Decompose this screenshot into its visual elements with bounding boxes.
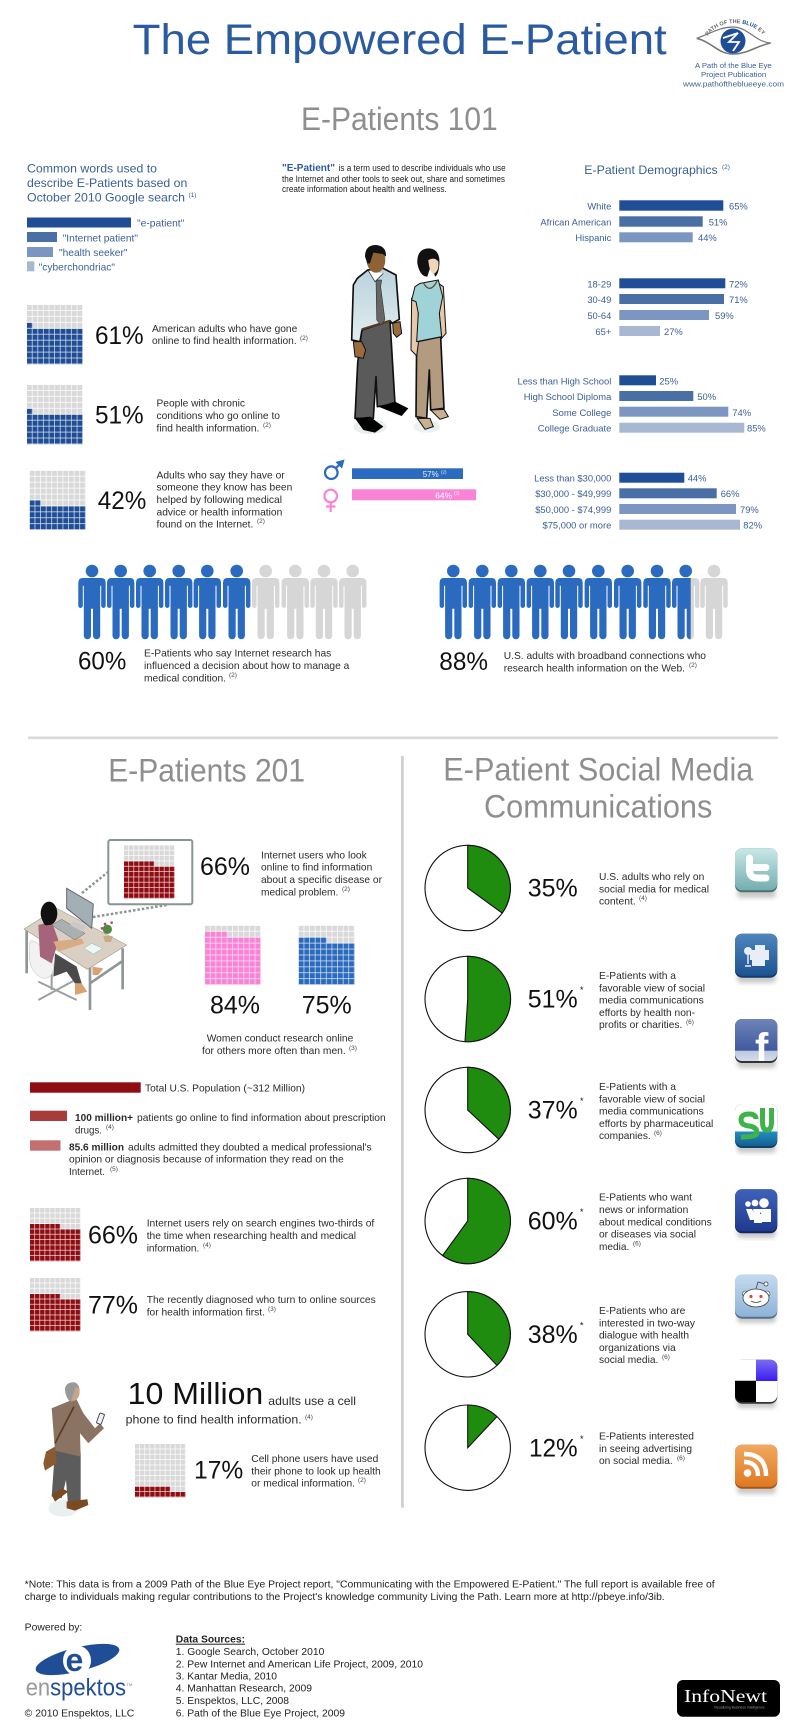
logo: InfoNewt: Visualizing Business Intelligence [714, 1706, 765, 1710]
income bars: 82% [743, 520, 762, 530]
stat 66% search engines: the time when researching health and medical [147, 1230, 356, 1242]
age bars: 18-29 [587, 278, 611, 290]
icon: Reddit [735, 1275, 777, 1323]
age bars: 59% [715, 310, 734, 321]
stat 35%: U.S. adults who rely on [599, 871, 704, 883]
stat 12%: in seeing advertising [599, 1443, 692, 1455]
note: charge to individuals making regular contributions to the Project's knowledge community Living the Path. Learn more at http://pbeye.info/3ib. [25, 1592, 665, 1603]
illustration: man and woman [352, 245, 448, 434]
logo: Enspektos [26, 1637, 132, 1702]
people pictogram 88% [440, 565, 728, 639]
stat 51%: * [580, 985, 584, 995]
stat 12%: E-Patients interested [599, 1431, 694, 1443]
income bars: $50,000 - $74,999 [535, 504, 611, 515]
stat 42% [98, 469, 292, 531]
85.6 million: 85.6 million [69, 1141, 124, 1153]
female bar: 64% [435, 491, 452, 500]
stat 88%: U.S. adults with broadband connections who [504, 650, 706, 662]
stat 37%: E-Patients with a [599, 1081, 676, 1093]
stat 17%: or medical information. [251, 1477, 355, 1489]
stat 51% [528, 970, 705, 1031]
stat 12%: * [580, 1434, 584, 1444]
panel: demographics [517, 163, 766, 530]
icon: male symbol [325, 461, 343, 479]
stat: women vs men [202, 991, 357, 1057]
stat 35%: social media for medical [599, 883, 709, 895]
pie 12% [425, 1405, 510, 1490]
icon: Delicious [735, 1360, 777, 1408]
pie 38% [425, 1292, 510, 1377]
waffle: women 84% [205, 926, 261, 985]
stat 37% [528, 1081, 713, 1142]
stat 66% look online: about a specific disease or [261, 874, 382, 886]
stat 51%: (2) [263, 422, 271, 429]
total population [30, 1082, 305, 1095]
stat 38%: 38% [528, 1321, 578, 1349]
stat 51%: E-Patients with a [599, 970, 676, 982]
stat 61%: (2) [300, 335, 308, 342]
stat 66% look online: (2) [342, 886, 350, 893]
stat 88%: (2) [689, 662, 697, 669]
stat 88% [439, 648, 706, 676]
stat 51%: profits or charities. [599, 1019, 682, 1031]
stat 42%: advice or health information [156, 506, 282, 518]
people pictogram 60% [78, 565, 366, 639]
logo: InfoNewt [677, 1680, 780, 1717]
demographics heading: E-Patient Demographics [584, 163, 718, 177]
age bars: 72% [729, 278, 748, 290]
100 million: (4) [106, 1124, 114, 1131]
data sources: 2. Pew Internet and American Life Project, 2009, 2010 [176, 1659, 423, 1670]
stat 51%: (6) [686, 1019, 694, 1026]
heading: E-Patients 101: E-Patients 101 [301, 101, 498, 137]
race bars: 44% [698, 232, 717, 243]
heading: E-Patient Social Media Communications: E-Patient Social Media [443, 752, 753, 788]
stat 37%: efforts by pharmaceutical [599, 1118, 713, 1130]
100 million: drugs. [75, 1124, 102, 1136]
data sources: 4. Manhattan Research, 2009 [176, 1684, 312, 1695]
stat 37%: favorable view of social [599, 1093, 705, 1105]
stat 17%: (2) [358, 1477, 366, 1484]
85.6 million: adults admitted they doubted a medical professional's [128, 1141, 372, 1153]
stat 60%: news or information [599, 1204, 688, 1216]
data sources [176, 1635, 423, 1719]
stat: women vs men: 84% [210, 991, 260, 1019]
E-Patient definition: create information about health and wellness. [282, 184, 447, 194]
female bar: (2) [454, 490, 460, 496]
stat 51%: conditions who go online to [156, 410, 280, 422]
data sources: 1. Google Search, October 2010 [176, 1647, 325, 1658]
education bars: 74% [732, 407, 751, 418]
education bars: High School Diploma [524, 391, 612, 402]
85.6 million: (5) [110, 1166, 118, 1173]
stat 88%: research health information on the Web. [504, 662, 685, 674]
note: *Note: This data is from a 2009 Path of the Blue Eye Project report, "Communicating with the Empowered E-Patient." The full report is available free of [25, 1580, 715, 1591]
stat 77% recently diagnosed [88, 1291, 376, 1319]
stat 37%: * [580, 1096, 584, 1106]
icon: robots [735, 934, 777, 983]
male bar: (2) [441, 470, 447, 474]
stat: 10 million: phone to find health information. [126, 1412, 302, 1426]
logo: Path of the Blue Eye: www.pathoftheblueeye.com [682, 80, 784, 89]
stat 60%: E-Patients who want [599, 1192, 692, 1204]
stat 77% recently diagnosed: The recently diagnosed who turn to online sources [147, 1294, 376, 1306]
icon: Twitter [735, 848, 777, 898]
E-Patient definition: "E-Patient" [282, 162, 335, 174]
waffle: 77% recently diagnosed [30, 1278, 81, 1331]
logo: Enspektos: e [66, 1642, 83, 1678]
stat 60%: 60% [528, 1208, 578, 1236]
male bar [352, 468, 463, 479]
income bars: 66% [721, 488, 739, 499]
stat 66% search engines: 66% [88, 1221, 138, 1249]
stat: 10 million: (4) [305, 1414, 313, 1421]
stat 42%: Adults who say they have or [156, 469, 285, 481]
stat: women vs men: 75% [302, 991, 352, 1019]
stat 38%: social media. [599, 1354, 658, 1366]
stat: women vs men: for others more often than men. [202, 1045, 346, 1057]
stat 51% [95, 398, 280, 434]
word bars: "e-patient" [137, 218, 185, 230]
word bars: "health seeker" [59, 247, 128, 259]
stat 17%: their phone to look up health [251, 1465, 381, 1477]
E-Patient definition: the Internet and other tools to seek out, share and sometimes [282, 174, 505, 184]
illustration: woman at desk [24, 888, 127, 1010]
stat 66% search engines: information. [147, 1242, 199, 1254]
stat 60%: media. [599, 1241, 629, 1253]
stat 60%: influenced a decision about how to manage a [144, 660, 349, 672]
education bars: 85% [747, 422, 766, 434]
logo: Path of the Blue Eye: A Path of the Blue Eye [695, 61, 772, 70]
waffle: 17% [135, 1444, 186, 1497]
stat 37%: companies. [599, 1130, 651, 1142]
waffle 51% [27, 385, 83, 444]
age bars: 50-64 [587, 310, 611, 321]
education bars: Some College [552, 407, 611, 418]
panel: waffle stats, 101 [27, 305, 308, 531]
stat 60%: E-Patients who say Internet research has [144, 648, 331, 660]
logo: InfoNewt: InfoNewt [684, 1686, 767, 1706]
income bars: 44% [688, 472, 706, 484]
common words heading [27, 162, 196, 204]
stat 17%: 17% [194, 1456, 243, 1484]
female bar [352, 489, 476, 500]
word bars [27, 218, 185, 274]
data sources: 6. Path of the Blue Eye Project, 2009 [176, 1708, 345, 1719]
stat 38%: E-Patients who are [599, 1305, 685, 1317]
waffle: 66% search engines [30, 1208, 81, 1261]
note [25, 1580, 715, 1603]
callout: monitor zoom waffle [82, 840, 192, 917]
age bars: 30-49 [587, 294, 611, 305]
race bars: African American [540, 216, 611, 228]
icon: MySpace [735, 1189, 777, 1238]
illustration: man with phone [43, 1382, 105, 1517]
logo: Path of the Blue Eye: Project Publication [701, 70, 766, 79]
heading: E-Patients 201: E-Patients 201 [108, 753, 305, 789]
stat 12%: 12% [529, 1434, 578, 1462]
common words heading: Common words used to [27, 162, 157, 176]
logo: Enspektos: enspektos [26, 1675, 126, 1702]
stat 37%: media communications [599, 1106, 704, 1118]
85.6 million: opinion or diagnosis because of information they read on the [69, 1154, 344, 1166]
stat 66% look online: Internet users who look [261, 849, 367, 861]
title: The Empowered E-Patient [133, 16, 667, 64]
stat 42%: someone they know has been [156, 482, 292, 494]
stat 61%: 61% [95, 322, 144, 350]
pie 35% [425, 845, 510, 931]
stat: 10 million: 10 Million [128, 1376, 263, 1411]
powered by: Powered by: [25, 1623, 82, 1634]
stat 17%: Cell phone users have used [251, 1453, 378, 1465]
stat 12% [529, 1431, 694, 1467]
race bars: White [587, 200, 611, 212]
stat 35% [528, 871, 709, 908]
panel: common words [27, 162, 196, 274]
stat 66% look online: 66% [200, 853, 250, 881]
stat 66% search engines: (4) [203, 1242, 211, 1249]
stat 38%: * [580, 1320, 584, 1330]
income bars: Less than $30,000 [534, 472, 611, 484]
age bars: 65+ [595, 326, 612, 337]
stat 77% recently diagnosed: for health information first. [147, 1306, 265, 1318]
stat 60%: about medical conditions [599, 1216, 712, 1228]
100 million: 100 million+ [75, 1112, 133, 1124]
data sources: 3. Kantar Media, 2010 [176, 1672, 277, 1683]
stat 66% search engines [88, 1218, 374, 1254]
stat 66% search engines: Internet users rely on search engines two-thirds of [147, 1218, 374, 1230]
stat 38%: organizations via [599, 1342, 676, 1354]
stat 38%: (6) [662, 1354, 670, 1361]
pie 60% [425, 1178, 510, 1264]
icon: Facebook [735, 1019, 777, 1070]
stat 51%: media communications [599, 994, 704, 1006]
age bars: 71% [729, 294, 748, 305]
common words heading: (1) [188, 192, 196, 199]
stat 60%: (6) [633, 1240, 641, 1248]
stat 35%: (4) [639, 895, 647, 902]
male bar: 57% [423, 470, 439, 479]
pie 37% [425, 1067, 510, 1153]
icon: Facebook: f [755, 1026, 769, 1070]
stat 51%: favorable view of social [599, 982, 705, 994]
stat 60%: or diseases via social [599, 1229, 696, 1241]
word bars: "cyberchondriac" [39, 262, 115, 274]
heading: E-Patient Social Media Communications [443, 752, 753, 825]
stat 38%: interested in two-way [599, 1317, 696, 1329]
race bars: 51% [709, 216, 727, 228]
race bars: Hispanic [575, 232, 612, 243]
stat 17% [194, 1453, 381, 1489]
stat 60%: * [580, 1207, 584, 1217]
logo: Enspektos: TM [126, 1682, 132, 1687]
age bars [587, 278, 748, 337]
stat 61%: American adults who have gone [152, 323, 297, 335]
stat 60%: medical condition. [144, 672, 226, 684]
stat: women vs men: (3) [349, 1045, 357, 1052]
data sources: 5. Enspektos, LLC, 2008 [176, 1696, 289, 1707]
stat 60% [528, 1192, 712, 1253]
heading: E-Patient Social Media Communications: Communications [484, 789, 712, 825]
stat 88%: 88% [439, 648, 488, 676]
demographics heading: (2) [722, 164, 730, 171]
education bars: 50% [697, 391, 716, 402]
income bars: $30,000 - $49,999 [535, 488, 611, 499]
stat 35%: 35% [528, 875, 578, 903]
100 million [30, 1111, 386, 1136]
education bars [517, 375, 766, 434]
stat 51%: 51% [95, 401, 144, 429]
stat 60%: (2) [229, 672, 237, 679]
stat 38% [528, 1305, 696, 1366]
stat: women vs men: Women conduct research online [207, 1033, 353, 1045]
panel: population bars [30, 1082, 386, 1178]
E-Patient definition [282, 162, 506, 194]
stat 77% recently diagnosed: 77% [88, 1291, 138, 1319]
education bars: 25% [659, 376, 678, 386]
copyright: © 2010 Enspektos, LLC [25, 1709, 134, 1720]
total population: Total U.S. Population (~312 Million) [145, 1083, 305, 1095]
stat 51%: People with chronic [156, 398, 245, 410]
stat 51%: find health information. [156, 422, 259, 434]
icon: female symbol [324, 490, 337, 512]
common words heading: October 2010 Google search [27, 190, 185, 204]
common words heading: describe E-Patients based on [27, 176, 187, 190]
stat 35%: content. [599, 896, 636, 908]
85.6 million: Internet. [69, 1166, 105, 1178]
logo: Path of the Blue Eye [682, 19, 784, 89]
waffle 61% [27, 305, 83, 364]
stat 38%: dialogue with health [599, 1330, 689, 1342]
panel: gender [324, 461, 476, 512]
stat 61%: online to find health information. [152, 335, 297, 347]
stat 42%: 42% [98, 487, 146, 515]
race bars: 65% [729, 200, 748, 212]
icon: StumbleUpon [735, 1104, 777, 1153]
income bars [534, 472, 762, 530]
stat 42%: helped by following medical [156, 494, 282, 506]
income bars: $75,000 or more [543, 520, 611, 530]
stat 77% recently diagnosed: (3) [268, 1306, 276, 1313]
income bars: 79% [740, 504, 759, 515]
panel: 60% pictogram [78, 565, 366, 684]
stat 37%: (6) [654, 1130, 662, 1137]
race bars [540, 200, 748, 243]
85.6 million [30, 1140, 372, 1178]
age bars: 27% [664, 326, 683, 337]
stat 12%: on social media. [599, 1455, 673, 1467]
stat 66% look online: online to find information [261, 862, 372, 874]
E-Patient definition: is a term used to describe individuals who use [338, 163, 506, 173]
word bars: "Internet patient" [63, 233, 138, 245]
stat 66% look online [200, 849, 382, 898]
stat 42%: found on the Internet. [156, 519, 253, 531]
panel: social media icons [735, 848, 777, 1494]
stat 60%: 60% [78, 647, 126, 675]
waffle: men 75% [299, 926, 355, 985]
education bars: Less than High School [517, 376, 611, 386]
100 million: patients go online to find information about prescription [137, 1112, 386, 1124]
stat 51%: efforts by health non- [599, 1007, 695, 1019]
stat 12%: (6) [677, 1455, 685, 1462]
education bars: College Graduate [538, 422, 611, 434]
stat 37%: 37% [528, 1097, 578, 1125]
stat 42%: (2) [257, 518, 265, 525]
stat: 10 million: adults use a cell [268, 1394, 356, 1408]
data sources: Data Sources: [176, 1635, 245, 1646]
stat 66% look online: medical problem. [261, 886, 338, 898]
stat 61% [95, 322, 308, 350]
stat: 10 million [126, 1376, 356, 1426]
stat 51%: 51% [528, 986, 578, 1014]
icon: RSS [735, 1445, 777, 1494]
waffle 42% [30, 471, 86, 530]
panel: 88% pictogram [439, 565, 728, 676]
panel: social media pies [425, 845, 713, 1490]
pie 51% [425, 956, 511, 1042]
stat 60% [78, 647, 349, 684]
